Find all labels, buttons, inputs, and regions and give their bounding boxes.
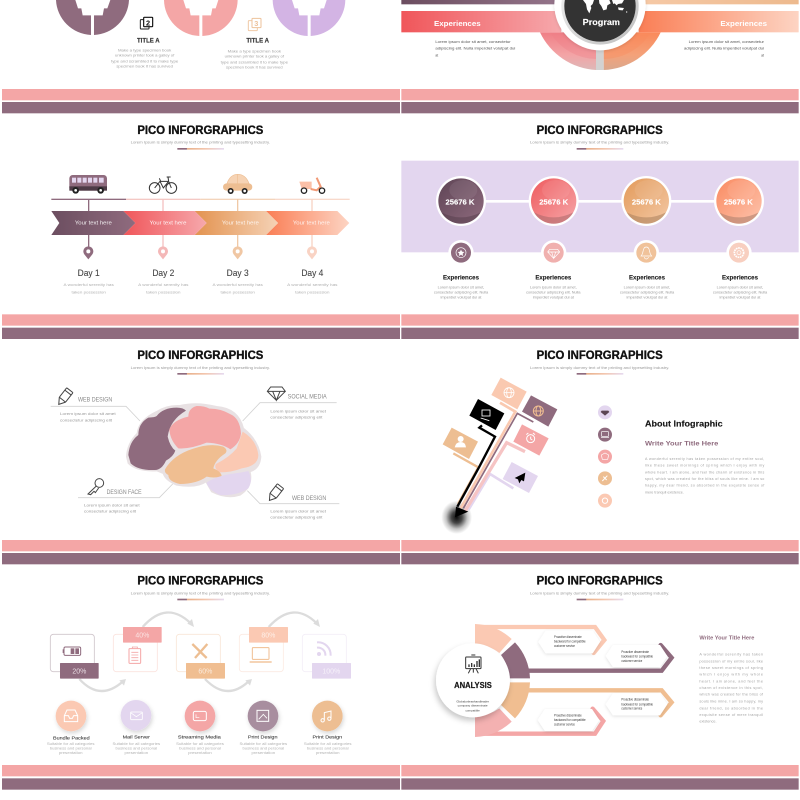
panel: transport timeline <box>2 123 400 339</box>
icon: map pins <box>83 246 317 259</box>
text: captions: A wonderful serenity has <box>212 282 263 287</box>
text: title A two: specimen book It has survived <box>226 66 283 70</box>
text: item captions: Suitable for all categories <box>239 742 287 746</box>
heading: PICO INFORGRAPHICS <box>537 123 663 137</box>
text: item captions: presentation <box>59 751 82 755</box>
icon: program globe badge: Program <box>583 17 620 27</box>
arrow: your text here 2 <box>123 211 207 235</box>
timeline rule <box>51 199 350 248</box>
text: item captions: presentation <box>124 751 148 755</box>
text: about: happy, my dear friend, so absorbed in the exquisite sense of <box>645 484 765 488</box>
hexagon: callout 4: Proactive disseminate <box>554 713 582 717</box>
icon: presentation board <box>466 655 481 673</box>
text: body copy: imperdiet volutpat dui at <box>440 296 481 300</box>
text: item captions: business and personal <box>307 747 349 751</box>
text: experiences headings: Experiences <box>722 275 759 281</box>
icon: number 3 <box>248 18 261 31</box>
text: title A one: TITLE A <box>137 38 160 45</box>
text: title A one: specimen book It has survived <box>116 65 173 69</box>
arrows: curved flow <box>79 613 320 691</box>
heading <box>530 573 669 600</box>
card: person peach <box>443 428 478 459</box>
hexagon: callout 3: backward for compatible <box>621 702 653 706</box>
hexagon: callout 2: customer service <box>621 659 643 663</box>
arrow bands <box>480 627 672 734</box>
text: item captions: Suitable for all categories <box>304 742 352 746</box>
text: title A one <box>111 38 178 69</box>
hexagon: callout 2 <box>606 645 667 667</box>
text: item captions: presentation <box>316 751 339 755</box>
text: about: mere tranquil existence. <box>645 490 684 494</box>
heading <box>530 123 669 150</box>
heading: Lorem Ipsum is simply dummy text of the printing and typesetting industry. <box>131 365 270 370</box>
panel: about infographic <box>401 348 799 564</box>
text: left body: Lorem ipsum dolor sit amet, consectetur <box>435 40 512 44</box>
card: globe purple <box>522 395 557 427</box>
text: body copy: consectetur adipiscing elit. Nulla <box>620 291 674 295</box>
callout: web design lower: WEB DESIGN <box>292 496 326 502</box>
text: title A two: Make a type specimen book <box>228 49 281 53</box>
heading: PICO INFORGRAPHICS <box>137 573 263 587</box>
callout: web design: consectetur adipiscing elit <box>60 417 113 422</box>
ribbon: right experiences <box>604 11 799 70</box>
panel: progress cards <box>2 573 400 790</box>
text: title A two: TITLE A <box>246 38 269 45</box>
heading <box>131 348 270 375</box>
text: body copy: Lorem ipsum dolor sit amet, <box>530 286 577 290</box>
hexagon: callout 4 <box>538 709 599 731</box>
panel: analysis <box>401 573 799 790</box>
callout: social media <box>267 387 327 420</box>
text: item captions: business and personal <box>50 747 92 751</box>
icon: bell badge <box>634 240 659 265</box>
text: about: About Infographic <box>645 419 723 429</box>
text: days: Day 2 <box>152 268 174 278</box>
hexagon: callout 1: Proactive disseminate <box>554 635 582 639</box>
text: item labels: Mail Server <box>123 734 150 740</box>
text: item labels <box>53 734 343 741</box>
heading: Lorem Ipsum is simply dummy text of the printing and typesetting industry. <box>530 140 669 145</box>
text: right column: dear friend, so absorbed in the <box>699 706 763 710</box>
text: analysis label <box>454 681 492 712</box>
text: body copy: imperdiet volutpat dui at <box>533 296 574 300</box>
text: analysis label: ANALYSIS <box>454 681 492 690</box>
card: laptop 80% <box>239 627 288 672</box>
text: item captions <box>47 742 352 755</box>
callout: social media: consectetur adipiscing elit <box>270 415 323 420</box>
text: item labels: Print Design <box>248 735 278 741</box>
heading: Lorem Ipsum is simply dummy text of the printing and typesetting industry. <box>131 140 270 145</box>
stat circles <box>436 176 764 226</box>
text: left body <box>435 40 516 58</box>
hexagon: callout 3: customer service <box>621 707 643 711</box>
text: about: whole heart. I am alone, and feel the charm of existence in this <box>645 470 765 474</box>
stat circles: 25676 K <box>724 198 753 207</box>
text: left body: at <box>435 54 438 58</box>
text: item labels: Streaming Media <box>178 735 221 741</box>
card: battery 20% <box>50 634 99 679</box>
text: right column: possession of my entire soul, like <box>699 659 763 663</box>
card: tools 60% <box>176 634 225 679</box>
text: right column: exquisite sense of mere tranquil <box>699 713 763 717</box>
panel: program <box>401 0 799 113</box>
icon: program globe badge <box>554 0 646 50</box>
top bars <box>401 0 799 4</box>
callout: design face: consectetur adipiscing elit <box>84 509 137 514</box>
text: body copy: Lorem ipsum dolor sit amet, <box>624 286 670 290</box>
ribbon: left experiences: Experiences <box>434 19 481 28</box>
callout: social media: SOCIAL MEDIA <box>288 395 327 401</box>
text: body copy: consectetur adipiscing elit. Nulla <box>713 291 767 295</box>
text: item captions: presentation <box>188 751 212 755</box>
card: rss 100%: 100% <box>322 668 340 675</box>
text: right column: charm of existence in this spot, <box>699 686 763 690</box>
callout: web design lower <box>266 484 327 520</box>
footer bars <box>401 765 799 790</box>
chart: three cut donuts <box>56 0 345 36</box>
text: about: spot, which was created for the bliss of souls like mine. I am so <box>645 477 764 481</box>
center strip <box>596 47 604 70</box>
text: title A one: Make a type specimen book <box>118 48 172 52</box>
callout: web design <box>56 388 117 422</box>
footer bars <box>401 314 799 339</box>
text: days <box>78 268 323 278</box>
text: captions: taken possession <box>295 289 329 294</box>
ring segments <box>475 624 530 737</box>
text: captions: A wonderful serenity has <box>63 282 114 287</box>
text: captions: A wonderful serenity has <box>287 282 337 287</box>
analysis circle <box>436 643 510 717</box>
stat circles: 25676 K <box>632 198 661 207</box>
footer bars <box>401 89 799 113</box>
heading: Lorem Ipsum is simply dummy text of the printing and typesetting industry. <box>131 590 270 595</box>
text: right body <box>684 40 765 58</box>
text: body copy: Lorem ipsum dolor sit amet, <box>717 286 763 290</box>
text: analysis label: Globalunleashandleader <box>456 699 489 703</box>
icon: print design <box>248 701 278 731</box>
text: right column: souls like mine. I am so happy, my <box>699 700 763 704</box>
text: body copy: imperdiet volutpat dui at <box>719 296 760 300</box>
text: about: A wonderful serenity has taken possession of my entire soul, <box>645 457 764 461</box>
callout: design face: DESIGN FACE <box>107 490 142 496</box>
card: laptop 80%: 80% <box>261 632 275 639</box>
text: item labels: Print Design <box>312 735 343 741</box>
text: about: like these sweet mornings of spring which I enjoy with my <box>645 464 765 468</box>
text: analysis label: compatible <box>465 708 480 712</box>
callout: web design lower: consectetur adipiscing elit <box>270 515 323 520</box>
text: body copy <box>434 286 767 300</box>
icon: number 3: 3 <box>254 19 258 28</box>
heading: PICO INFORGRAPHICS <box>137 123 263 137</box>
heading: PICO INFORGRAPHICS <box>537 573 663 587</box>
arrow: your text here 2: Your text here <box>149 221 186 227</box>
text: item labels: Bundle Packed <box>53 735 90 741</box>
callout: social media: Lorem ipsum dolor sit amet <box>270 408 327 413</box>
text: right body: at <box>761 54 764 58</box>
text: title A two: type and scrambled it to make type <box>221 60 288 64</box>
footer bars <box>2 89 400 113</box>
heading <box>131 573 270 600</box>
callout: web design: WEB DESIGN <box>78 397 112 403</box>
hexagon: callout 3 <box>606 693 667 715</box>
panel: brain <box>2 348 400 564</box>
icon: music <box>312 701 343 731</box>
text: item captions: Suitable for all categories <box>47 742 95 746</box>
icon: streaming media <box>185 701 215 731</box>
hexagon: callout 2: Proactive disseminate <box>621 650 649 654</box>
card: rss 100% <box>302 634 351 679</box>
text: item captions: Suitable for all categories <box>112 742 160 746</box>
arrow: your text here 3 <box>195 211 278 235</box>
text: captions: taken possession <box>71 289 106 294</box>
card: clipboard 40% <box>113 627 162 672</box>
panel: stats <box>401 123 799 339</box>
text: right column: existence. <box>699 720 717 724</box>
text: right column: A wonderful serenity has taken <box>699 653 763 657</box>
footer bars <box>2 765 400 790</box>
text: captions <box>63 282 337 294</box>
text: title A one: unknown printer took a galley of <box>115 54 175 58</box>
text: item captions: business and personal <box>242 747 284 751</box>
heading <box>131 123 270 150</box>
heading: PICO INFORGRAPHICS <box>537 348 663 362</box>
text: experiences headings: Experiences <box>535 275 572 281</box>
text: right body: adipiscing elit. Nulla imperdiet volutpat dui <box>684 47 764 51</box>
card: monitor black <box>469 399 504 430</box>
icon: bicycle <box>149 177 177 193</box>
text: right column: these sweet mornings of spring <box>699 666 763 670</box>
hexagon: callout 4: backward for compatible <box>554 718 586 722</box>
text: days: Day 1 <box>78 268 100 278</box>
heading: Lorem Ipsum is simply dummy text of the printing and typesetting industry. <box>530 590 669 595</box>
callout: design face: Lorem ipsum dolor sit amet <box>84 502 141 507</box>
text: experiences headings: Experiences <box>443 275 480 281</box>
arrow: branching tree <box>453 403 533 517</box>
icon: number 2: 2 <box>146 18 150 27</box>
arrow: your text here 3: Your text here <box>222 221 259 227</box>
card: clock pink <box>513 424 549 456</box>
text: about: Write Your Title Here <box>645 440 719 447</box>
footer bars <box>401 540 799 564</box>
footer bars <box>2 314 400 339</box>
text: item captions: business and personal <box>179 747 221 751</box>
stat circles: 25676 K <box>446 198 475 207</box>
stat circles: 25676 K <box>539 198 569 207</box>
card: globe peach <box>491 378 527 409</box>
footer bars <box>2 540 400 564</box>
text: captions: taken possession <box>220 289 255 294</box>
text: body copy: Lorem ipsum dolor sit amet, <box>438 286 484 290</box>
arrow: your text here 1 <box>51 211 135 235</box>
icon: bundle packed <box>56 701 86 731</box>
text: days: Day 3 <box>227 268 249 278</box>
icon column <box>598 405 612 508</box>
icon: car <box>223 174 252 194</box>
text: days: Day 4 <box>301 268 323 278</box>
icon: gear badge <box>726 240 752 265</box>
card: clipboard 40%: 40% <box>135 632 149 639</box>
text: body copy: consectetur adipiscing elit. Nulla <box>434 291 488 295</box>
card: tools 60%: 60% <box>198 668 212 675</box>
hexagon: callout 3: Proactive disseminate <box>621 698 649 702</box>
text: item captions: presentation <box>251 751 275 755</box>
hexagon: callout 2: backward for compatible <box>621 655 653 659</box>
arrow: your text here 4: Your text here <box>293 221 330 227</box>
text: captions: A wonderful serenity has <box>138 282 188 287</box>
ribbon: right experiences: Experiences <box>720 19 767 28</box>
icon: number 2 <box>140 17 153 29</box>
text: item captions: Suitable for all categories <box>176 742 224 746</box>
text: body copy: consectetur adipiscing elit. Nulla <box>526 291 580 295</box>
text: right body: Lorem ipsum dolor sit amet, consectetur <box>689 40 765 44</box>
callout: web design lower: Lorem ipsum dolor sit amet <box>270 508 327 513</box>
connector line <box>461 200 739 203</box>
text: experiences headings: Experiences <box>629 275 666 281</box>
hexagon: callout 1 <box>538 631 600 653</box>
text: right column: which I enjoy with my whole <box>699 673 763 677</box>
callout: design face <box>84 479 142 514</box>
callout: web design: Lorem ipsum dolor sit amet <box>60 411 117 416</box>
text: analysis label: company disseminate <box>458 704 488 708</box>
text: right column: Write Your Title Here <box>699 636 754 642</box>
heading: PICO INFORGRAPHICS <box>137 348 263 362</box>
panel: title A cards <box>2 0 400 113</box>
ribbon: left experiences <box>401 11 596 70</box>
text: left body: adipiscing elit. Nulla imperdiet volutpat dui <box>435 47 516 51</box>
text: about <box>645 419 765 494</box>
text: captions: taken possession <box>146 289 180 294</box>
text: title A two <box>221 38 288 70</box>
text: item captions: business and personal <box>115 747 157 751</box>
text: title A two: unknown printer took a galley of <box>225 55 285 59</box>
text: right column: heart. I am alone, and feel the <box>699 679 763 683</box>
text: body copy: imperdiet volutpat dui at <box>626 296 667 300</box>
text: experiences headings <box>443 275 759 281</box>
icon: diamond badge <box>541 240 566 265</box>
arrow: your text here 4 <box>266 211 349 235</box>
lilac band <box>401 161 799 252</box>
icon: bus <box>69 175 107 194</box>
hexagon: callout 4: customer service <box>554 723 575 727</box>
arrow shadow <box>441 501 472 534</box>
icon: mail server <box>121 700 151 731</box>
hexagon: callout 1: customer service <box>554 644 575 648</box>
heading <box>530 348 669 375</box>
icon: star badge <box>448 240 474 265</box>
hexagon: callout 1: backward for compatible <box>554 640 586 644</box>
callout lines <box>51 403 339 504</box>
icon: scooter <box>299 178 325 193</box>
text: right column <box>699 636 764 724</box>
heading: Lorem Ipsum is simply dummy text of the printing and typesetting industry. <box>530 365 669 370</box>
card: plane lilac <box>503 462 538 493</box>
card: battery 20%: 20% <box>72 668 86 675</box>
chart: brain <box>127 404 261 497</box>
arrow: your text here 1: Your text here <box>75 221 112 227</box>
text: right column: which was created for the bliss of <box>699 693 764 697</box>
text: title A one: type and scrambled it to make type <box>111 59 178 63</box>
